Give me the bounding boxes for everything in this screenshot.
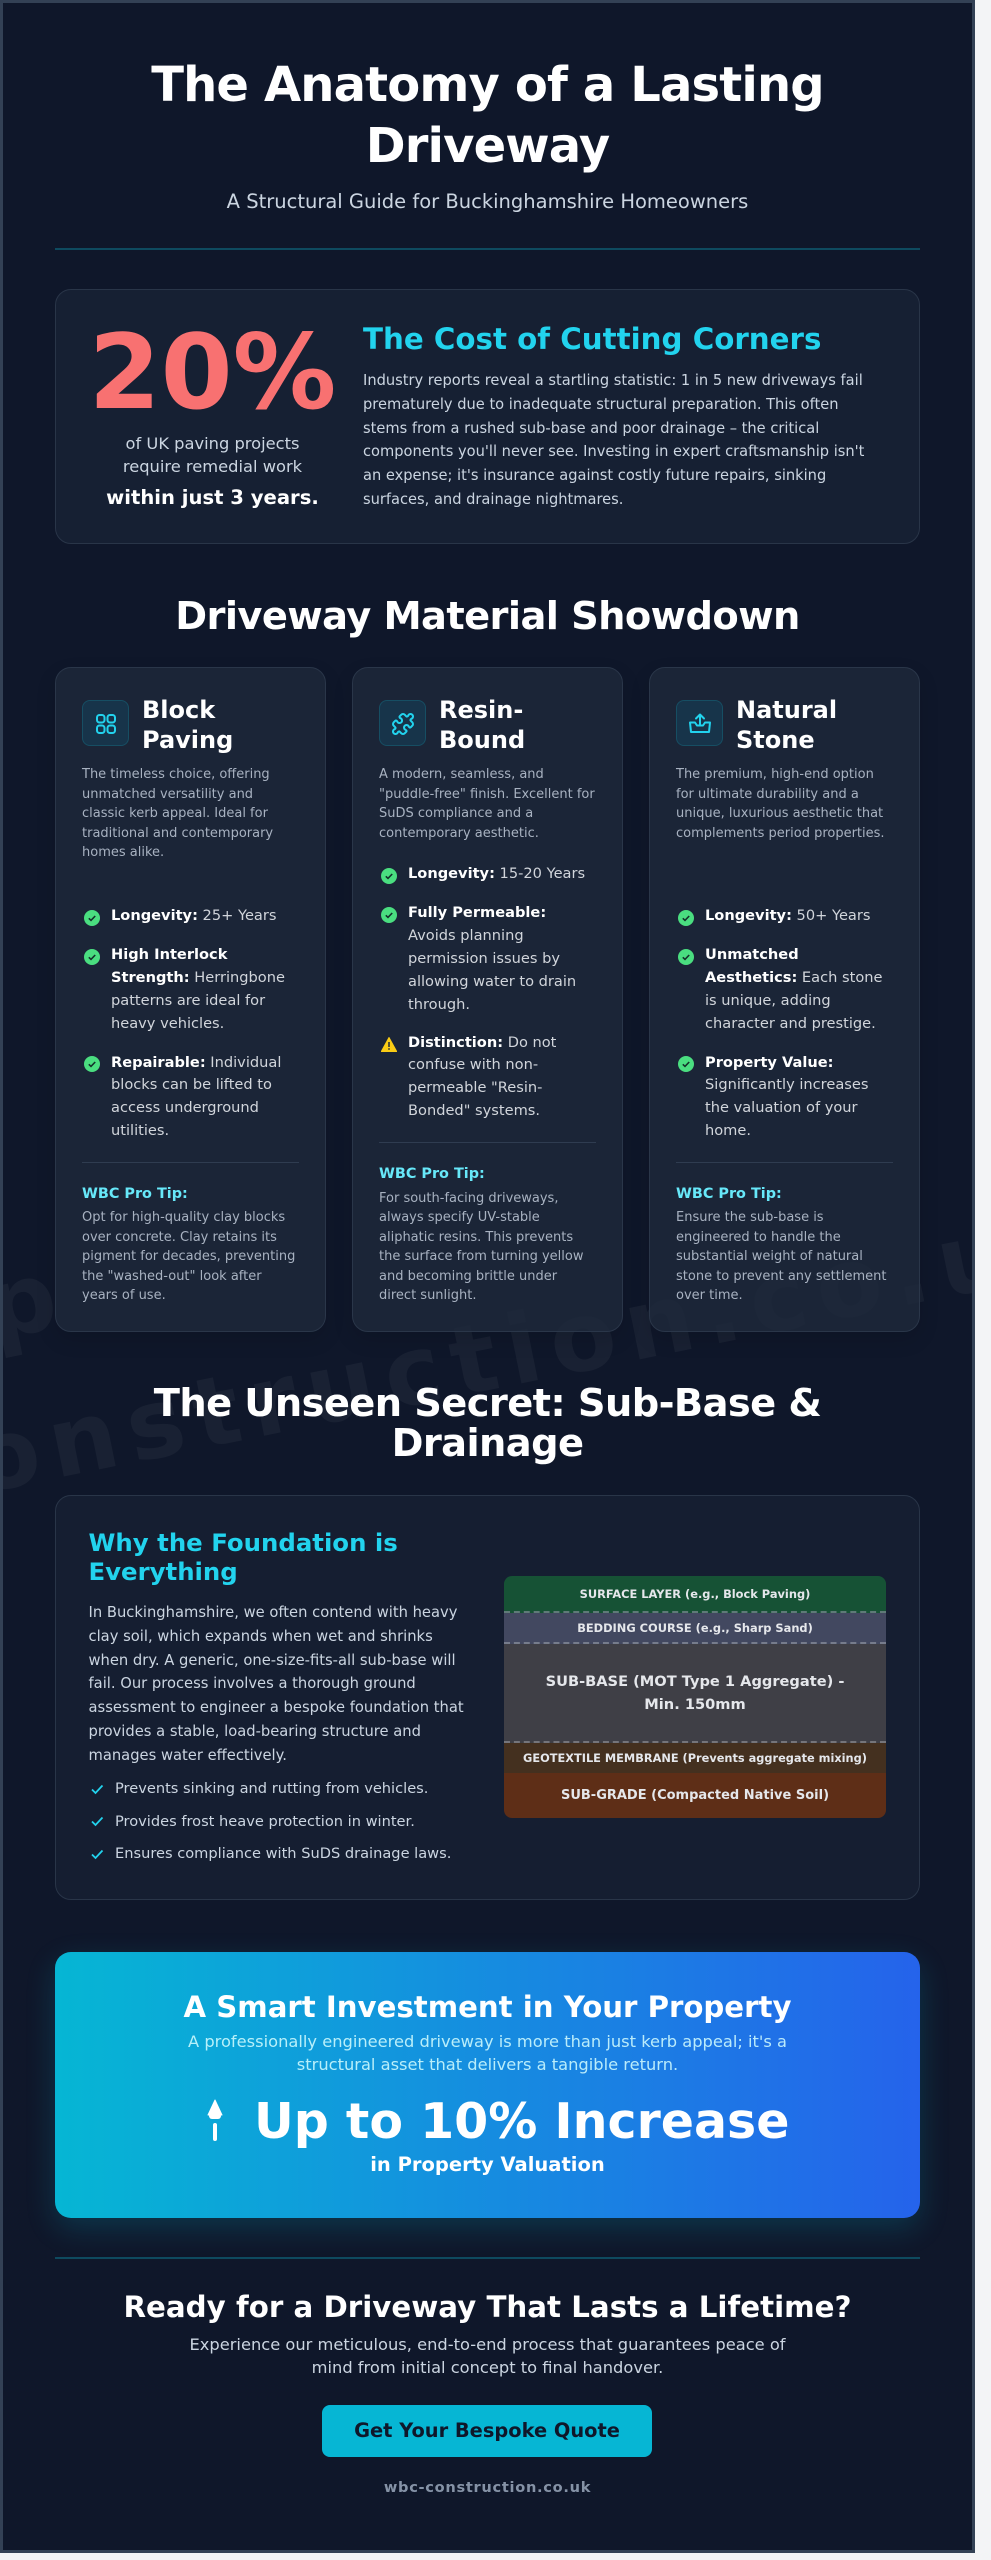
benefit: compliance: Ensures compliance with SuDS drainage laws. bbox=[115, 1845, 451, 1862]
pro tip text: the surface from turning yellow bbox=[379, 1249, 583, 1264]
icon: tick bbox=[91, 1816, 104, 1826]
pro tip text: years of use. bbox=[82, 1288, 166, 1303]
banner: smart investment bbox=[55, 1952, 920, 2218]
heading: cost of cutting corners: The Cost of Cutting Corners bbox=[363, 322, 821, 356]
feature: interlock: patterns are ideal for bbox=[111, 992, 265, 1009]
card heading: Bound bbox=[439, 726, 525, 754]
foundation body text: provides a stable, load-bearing structure and bbox=[88, 1723, 421, 1740]
body text: an expense; it's insurance against costly future repairs, sinking bbox=[363, 467, 826, 484]
feature: distinction bbox=[408, 1034, 556, 1119]
benefit: frost: Provides frost heave protection in winter. bbox=[115, 1812, 415, 1830]
icon: tick bbox=[91, 1784, 104, 1794]
icon: check bbox=[381, 868, 397, 884]
feature: interlock bbox=[111, 946, 285, 1032]
feature: distinction: permeable "Resin- bbox=[408, 1079, 542, 1096]
layer: sub-grade bbox=[504, 1773, 886, 1818]
heading: unseen secret bbox=[154, 1381, 821, 1466]
feature: aesthetics: Aesthetics: Each stone bbox=[705, 969, 882, 986]
button: get quote bbox=[322, 2405, 652, 2457]
feature: aesthetics bbox=[705, 946, 882, 1032]
body text: prematurely due to inadequate structural preparation. This often bbox=[363, 396, 838, 413]
card heading: Natural bbox=[736, 696, 837, 724]
card: natural stone bbox=[649, 667, 920, 1332]
layer: geotextile bbox=[504, 1743, 886, 1773]
foundation body text: assessment to engineer a bespoke foundation that bbox=[88, 1699, 464, 1716]
statistic caption: in Property Valuation bbox=[370, 2153, 605, 2176]
statistic emphasis: within just 3 years. bbox=[106, 486, 319, 509]
description: classic kerb appeal. Ideal for bbox=[82, 806, 268, 821]
description: SuDS compliance and a bbox=[379, 806, 533, 821]
pro tip text: stone to prevent any settlement bbox=[676, 1268, 886, 1284]
feature: permeable: allowing water to drain bbox=[408, 973, 576, 990]
pro tip label: WBC Pro Tip: bbox=[379, 1166, 485, 1182]
pro tip text bbox=[82, 1210, 295, 1303]
card heading bbox=[736, 696, 837, 754]
foundation body text: In Buckinghamshire, we often contend with heavy bbox=[88, 1604, 457, 1621]
icon: check bbox=[678, 949, 694, 965]
feature: longevity: Longevity: 50+ Years bbox=[705, 907, 870, 924]
icon: check bbox=[678, 1056, 694, 1072]
foundation body text: when dry. A generic, one-size-fits-all sub-base will bbox=[88, 1652, 456, 1668]
heading: call to action: Ready for a Driveway That Lasts a Lifetime? bbox=[123, 2290, 852, 2324]
feature: permeable: Avoids planning bbox=[408, 927, 524, 944]
card heading: Resin- bbox=[439, 696, 523, 724]
banner text bbox=[188, 2032, 787, 2074]
layer: sub-base: SUB-BASE (MOT Type 1 Aggregate) - bbox=[546, 1672, 844, 1690]
statistic caption bbox=[123, 434, 302, 476]
feature: interlock: heavy vehicles. bbox=[111, 1015, 224, 1032]
banner text: structural asset that delivers a tangible return. bbox=[297, 2054, 678, 2074]
feature: aesthetics: Unmatched bbox=[705, 946, 799, 963]
heading: material showdown: Driveway Material Showdown bbox=[175, 594, 800, 639]
description bbox=[676, 767, 885, 840]
layer: bedding: BEDDING COURSE (e.g., Sharp Sand) bbox=[577, 1620, 813, 1634]
call to action text: Experience our meticulous, end-to-end process that guarantees peace of bbox=[190, 2335, 786, 2354]
banner heading: A Smart Investment in Your Property bbox=[184, 1990, 791, 2024]
feature: repairable: utilities. bbox=[111, 1122, 169, 1139]
feature: distinction: Distinction: Do not bbox=[408, 1034, 556, 1050]
description: The timeless choice, offering bbox=[82, 767, 270, 782]
layer: sub-base bbox=[504, 1644, 886, 1743]
pro tip text: over time. bbox=[676, 1288, 743, 1303]
icon: puzzle bbox=[379, 700, 426, 746]
icon: tray with arrow bbox=[676, 700, 723, 746]
body text bbox=[363, 372, 864, 508]
call to action text: mind from initial concept to final handover. bbox=[312, 2358, 663, 2376]
pro tip text: engineered to handle the bbox=[676, 1230, 841, 1244]
layer: sub-base: Min. 150mm bbox=[644, 1696, 746, 1712]
description: complements period properties. bbox=[676, 826, 885, 840]
card heading bbox=[439, 696, 525, 754]
feature: property value: the valuation of your bbox=[705, 1099, 858, 1116]
pro tip text: substantial weight of natural bbox=[676, 1249, 863, 1264]
pro tip text: For south-facing driveways, bbox=[379, 1190, 558, 1206]
feature: repairable: access underground bbox=[111, 1099, 259, 1116]
website link: wbc-construction.co.uk bbox=[384, 2479, 591, 2496]
feature: aesthetics: character and prestige. bbox=[705, 1015, 876, 1032]
body text: Industry reports reveal a startling statistic: 1 in 5 new driveways fail bbox=[363, 372, 863, 389]
feature: permeable: permission issues by bbox=[408, 950, 560, 967]
card heading bbox=[142, 696, 233, 754]
icon: grid bbox=[82, 700, 129, 746]
pro tip text: always specify UV-stable bbox=[379, 1210, 540, 1225]
icon: tick bbox=[91, 1850, 104, 1860]
feature: longevity: Longevity: 15-20 Years bbox=[408, 865, 585, 882]
feature: repairable bbox=[111, 1054, 281, 1139]
pro tip text bbox=[379, 1190, 583, 1303]
description: homes alike. bbox=[82, 845, 164, 860]
heading: unseen secret: The Unseen Secret: Sub-Base & bbox=[154, 1381, 821, 1426]
foundation heading bbox=[88, 1528, 398, 1586]
pro tip label: WBC Pro Tip: bbox=[676, 1186, 782, 1202]
title: Driveway bbox=[366, 118, 609, 174]
foundation body text: fail. Our process involves a thorough ground bbox=[88, 1675, 416, 1692]
title bbox=[151, 57, 824, 174]
description: A modern, seamless, and bbox=[379, 767, 544, 782]
button: get quote: Get Your Bespoke Quote bbox=[354, 2419, 620, 2442]
call to action text bbox=[190, 2335, 786, 2376]
card heading: Paving bbox=[142, 726, 233, 754]
feature: property value: home. bbox=[705, 1122, 751, 1139]
feature: repairable: Repairable: Individual bbox=[111, 1054, 281, 1070]
icon: arrow up bbox=[208, 2100, 222, 2141]
feature: interlock: Strength: Herringbone bbox=[111, 969, 285, 986]
pro tip text: the "washed-out" look after bbox=[82, 1268, 262, 1284]
feature: permeable: through. bbox=[408, 996, 470, 1013]
description: The premium, high-end option bbox=[676, 767, 874, 782]
pro tip text: pigment for decades, preventing bbox=[82, 1249, 295, 1264]
statistic caption: of UK paving projects bbox=[126, 434, 299, 453]
icon: check bbox=[84, 1056, 100, 1072]
foundation heading: Why the Foundation is bbox=[88, 1528, 398, 1556]
pro tip text: Ensure the sub-base is bbox=[676, 1210, 824, 1225]
feature: permeable: Fully Permeable: bbox=[408, 904, 546, 921]
card: resin-bound bbox=[352, 667, 623, 1332]
feature: interlock: High Interlock bbox=[111, 946, 227, 963]
body text: stems from a rushed sub-base and poor drainage – the critical bbox=[363, 420, 819, 436]
subtitle: A Structural Guide for Buckinghamshire Homeowners bbox=[227, 190, 748, 213]
icon: check bbox=[678, 910, 694, 926]
layer: bedding bbox=[504, 1613, 886, 1644]
foundation heading: Everything bbox=[88, 1557, 238, 1586]
benefit: sinking: Prevents sinking and rutting from vehicles. bbox=[115, 1780, 428, 1797]
feature: property value: Property Value: bbox=[705, 1054, 834, 1070]
pro tip text bbox=[676, 1210, 886, 1303]
feature: longevity: Longevity: 25+ Years bbox=[111, 907, 276, 924]
card: block paving bbox=[55, 667, 326, 1332]
card heading: Block bbox=[142, 696, 215, 724]
description: for ultimate durability and a bbox=[676, 786, 859, 802]
description bbox=[379, 767, 595, 840]
body text: components you'll never see. Investing in expert craftsmanship isn't bbox=[363, 443, 864, 460]
description: "puddle-free" finish. Excellent for bbox=[379, 786, 595, 802]
banner text: A professionally engineered driveway is more than just kerb appeal; it's a bbox=[188, 2032, 787, 2051]
feature: property value: Significantly increases bbox=[705, 1076, 868, 1093]
pro tip text: over concrete. Clay retains its bbox=[82, 1230, 277, 1244]
diagram: driveway layers bbox=[504, 1576, 886, 1818]
feature: repairable: blocks can be lifted to bbox=[111, 1076, 272, 1093]
card heading: Stone bbox=[736, 726, 815, 754]
feature: permeable bbox=[408, 904, 576, 1013]
icon: check bbox=[84, 949, 100, 965]
description: contemporary aesthetic. bbox=[379, 826, 539, 840]
icon: check bbox=[84, 910, 100, 926]
big statistic: 20% bbox=[89, 313, 336, 433]
pro tip text: and becoming brittle under bbox=[379, 1268, 557, 1284]
icon: check bbox=[381, 907, 397, 923]
foundation body text: manages water effectively. bbox=[88, 1746, 287, 1764]
statistic caption: require remedial work bbox=[123, 456, 302, 476]
pro tip text: aliphatic resins. This prevents bbox=[379, 1230, 573, 1244]
foundation body text: clay soil, which expands when wet and shrinks bbox=[88, 1628, 433, 1645]
layer: geotextile: GEOTEXTILE MEMBRANE (Prevents aggregate mixing) bbox=[523, 1751, 867, 1765]
title: The Anatomy of a Lasting bbox=[151, 57, 824, 113]
description bbox=[82, 767, 273, 860]
feature: distinction: confuse with non- bbox=[408, 1056, 538, 1073]
layer: sub-grade: SUB-GRADE (Compacted Native Soil) bbox=[561, 1788, 829, 1803]
feature: aesthetics: is unique, adding bbox=[705, 992, 831, 1009]
panel: cost of cutting corners bbox=[55, 289, 920, 544]
description: traditional and contemporary bbox=[82, 826, 273, 840]
feature: property value bbox=[705, 1054, 868, 1139]
feature: distinction: Bonded" systems. bbox=[408, 1102, 540, 1119]
pro tip text: direct sunlight. bbox=[379, 1288, 476, 1303]
description: unique, luxurious aesthetic that bbox=[676, 806, 883, 821]
layer: surface: SURFACE LAYER (e.g., Block Paving) bbox=[580, 1586, 810, 1600]
big statistic: Up to 10% Increase bbox=[254, 2093, 789, 2150]
description: unmatched versatility and bbox=[82, 786, 253, 802]
heading: unseen secret: Drainage bbox=[392, 1421, 583, 1466]
pro tip text: Opt for high-quality clay blocks bbox=[82, 1210, 285, 1225]
icon: warning bbox=[381, 1037, 397, 1052]
pro tip label: WBC Pro Tip: bbox=[82, 1186, 188, 1202]
layer: surface bbox=[504, 1576, 886, 1613]
foundation body text bbox=[88, 1604, 464, 1764]
panel: foundation bbox=[55, 1495, 920, 1900]
body text: surfaces, and drainage nightmares. bbox=[363, 491, 623, 508]
